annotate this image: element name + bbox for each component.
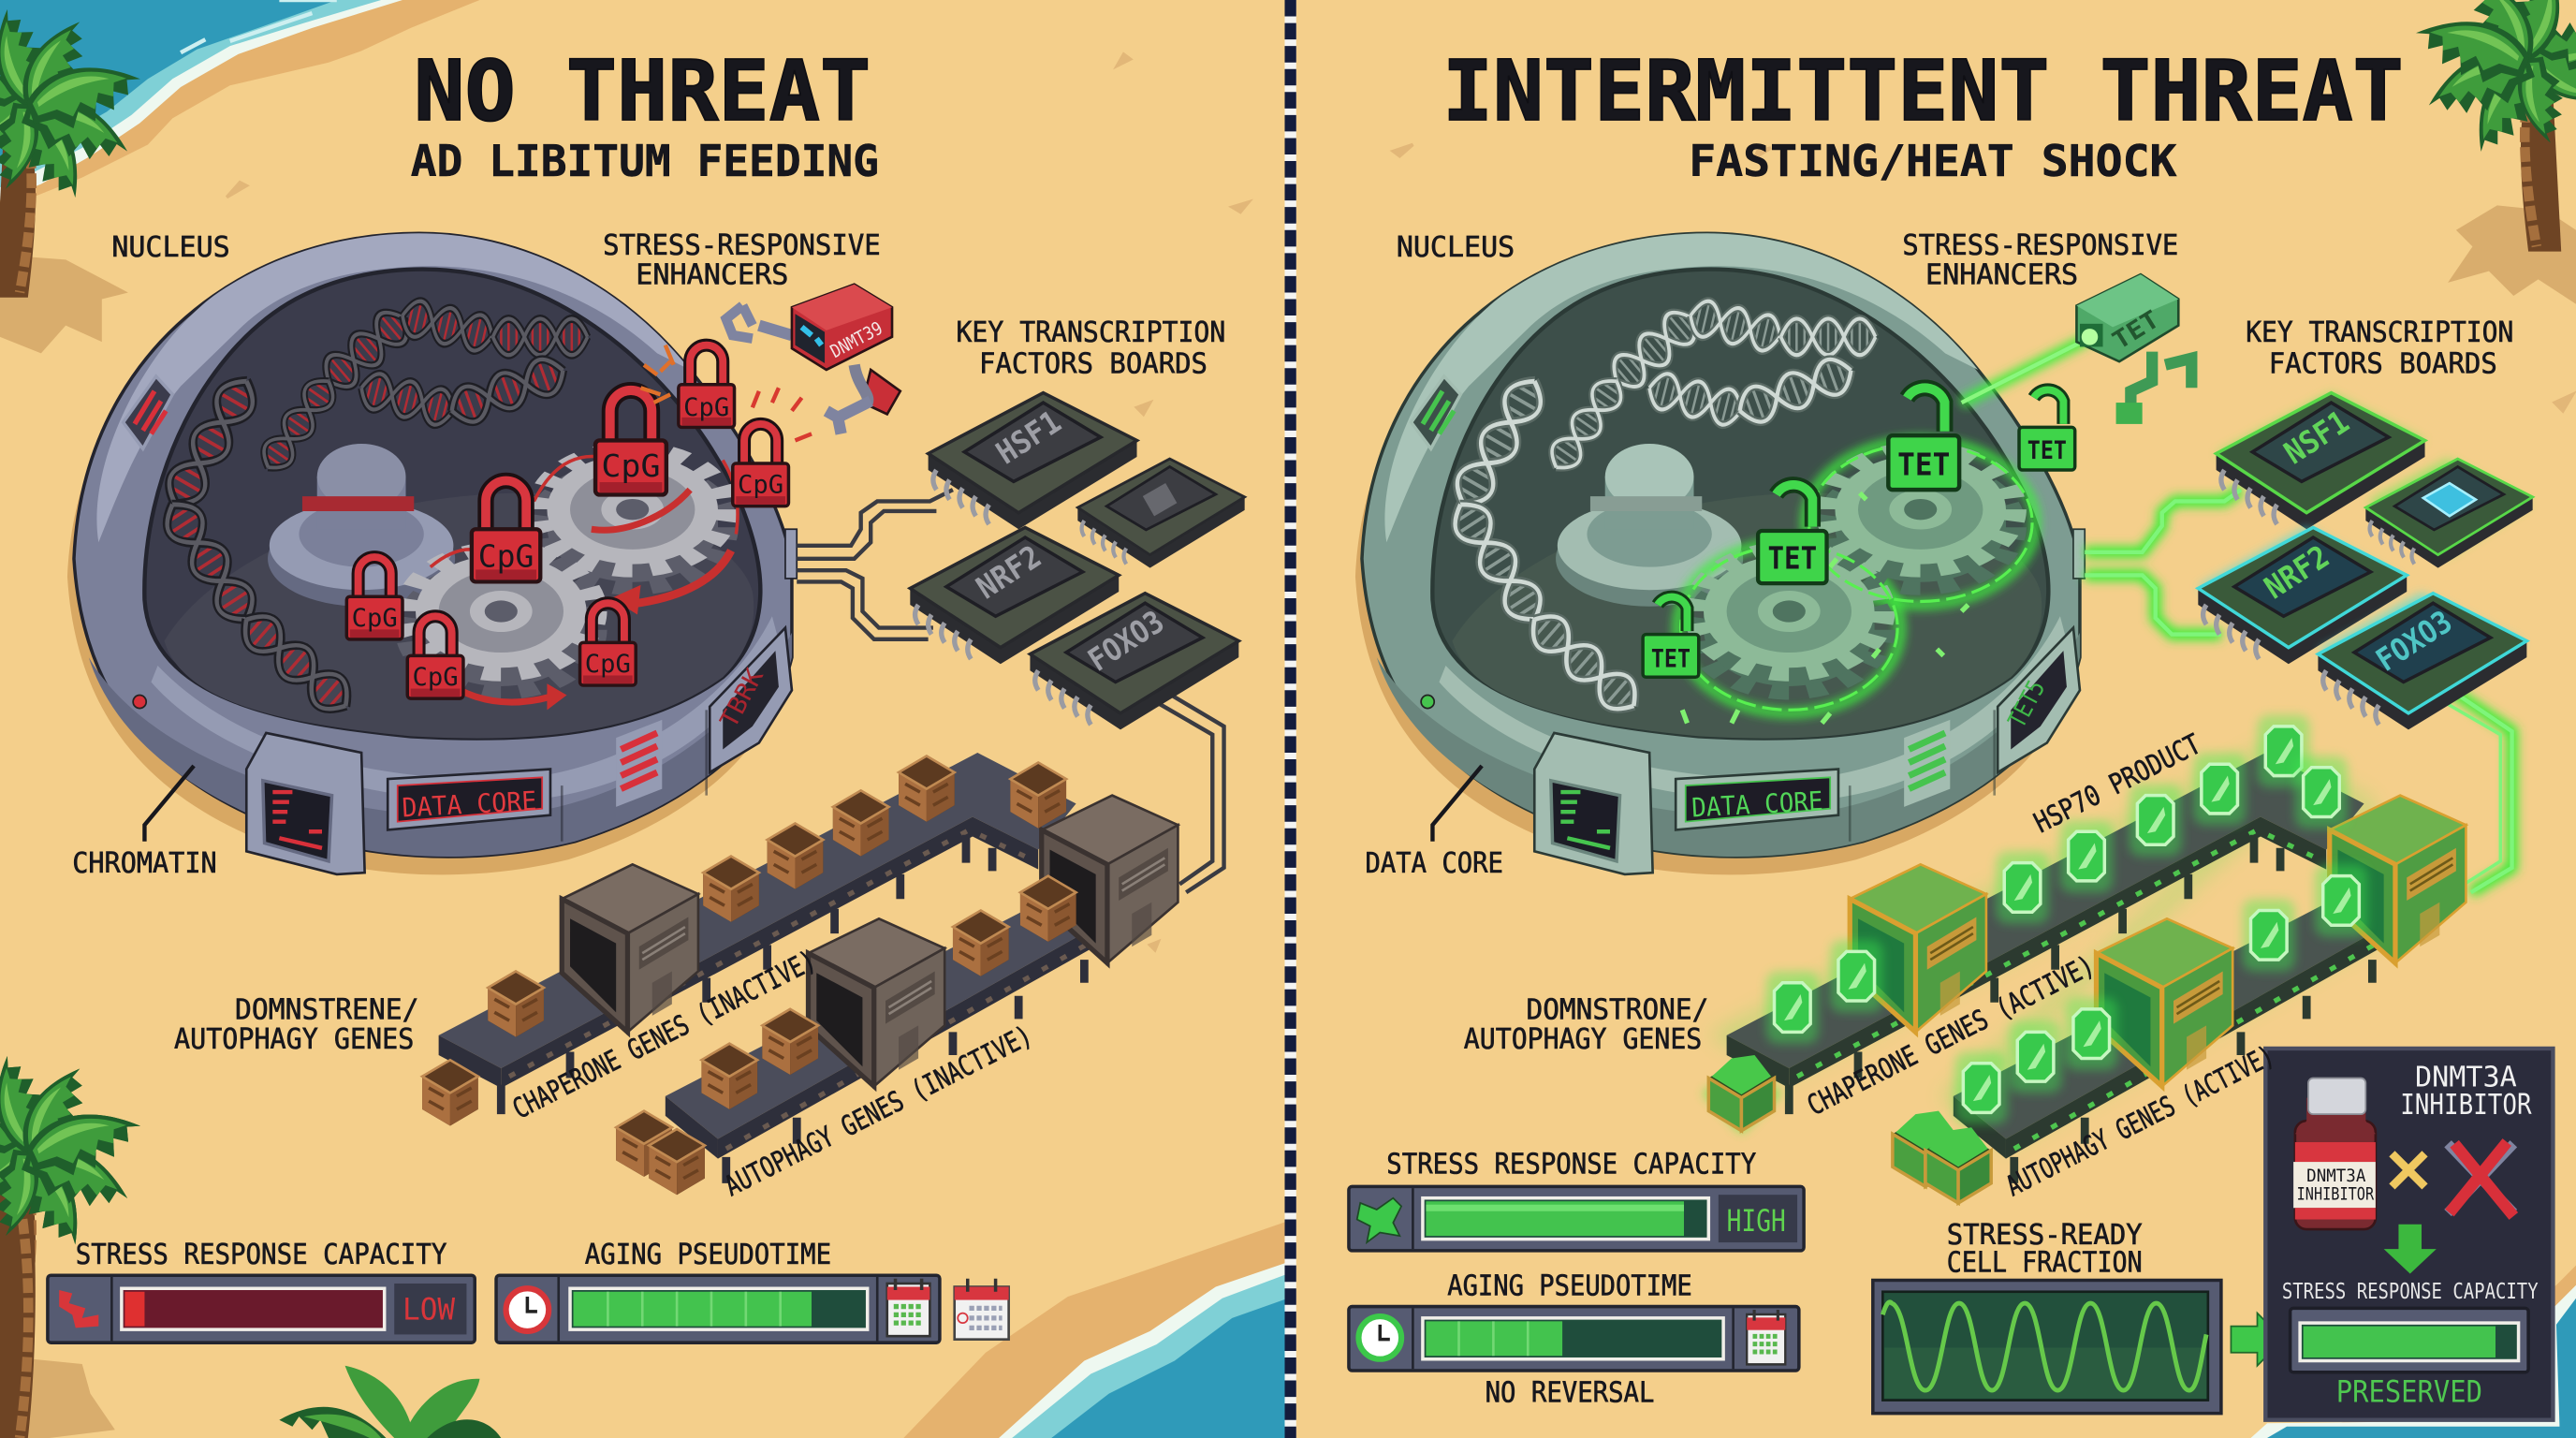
inhibitor heading: DNMT3A xyxy=(2415,1061,2517,1093)
label: stress response capacity: STRESS RESPONSE CAPACITY xyxy=(1386,1148,1756,1181)
subtitle: AD LIBITUM FEEDING xyxy=(411,136,879,186)
robot label: DNMT39 xyxy=(827,317,886,362)
cpg locks xyxy=(346,345,788,698)
lock: large cpg lower xyxy=(472,480,540,581)
label: hsp70 product: HSP70 PRODUCT xyxy=(2029,727,2206,840)
icon: yellow times xyxy=(2392,1153,2425,1186)
boards xyxy=(2198,393,2533,729)
label: stress-responsive enhancers: ENHANCERS xyxy=(636,259,788,292)
bar: preserved capacity xyxy=(2291,1308,2528,1372)
lock: cpg right xyxy=(733,424,788,506)
preserved label: PRESERVED xyxy=(2336,1375,2482,1409)
icon: inhibitor bottle xyxy=(2293,1078,2376,1229)
label: domnstrene autophagy genes: DOMNSTRENE/ xyxy=(235,993,419,1026)
icon: inhibitor bottle: INHIBITOR xyxy=(2297,1184,2375,1204)
data core sign: DATA CORE xyxy=(402,785,537,823)
panel: no threat xyxy=(48,43,1245,1343)
wires: nucleus to boards, glowing xyxy=(2085,490,2512,892)
board: nrf2: NRF2 xyxy=(970,538,1047,606)
label: stress-responsive enhancers xyxy=(1902,229,2178,292)
oscilloscope: stress-ready cell fraction xyxy=(1873,1280,2221,1414)
board: foxo3: FOXO3 xyxy=(1082,603,1170,679)
gears xyxy=(407,449,738,710)
label: autophagy genes inactive: AUTOPHAGY GENES (INACTIVE) xyxy=(720,1020,1037,1203)
data core label and leader: DATA CORE xyxy=(1365,847,1503,880)
label: transcription factor boards: KEY TRANSCRIPTION xyxy=(2246,316,2513,349)
label: transcription factor boards: FACTORS BOARDS xyxy=(979,347,1208,380)
lock: tet left: TET xyxy=(1651,646,1690,674)
lock: cpg bottom right xyxy=(580,603,636,685)
label: stress response capacity: STRESS RESPONSE CAPACITY xyxy=(76,1239,446,1271)
label: transcription factor boards xyxy=(2246,316,2513,380)
label: autophagy genes active: AUTOPHAGY GENES (ACTIVE) xyxy=(2001,1039,2279,1203)
machine: rear xyxy=(2330,796,2466,963)
label: stress-ready cell fraction xyxy=(1947,1219,2143,1280)
label: aging pseudotime: AGING PSEUDOTIME xyxy=(1447,1269,1692,1302)
bar: stress response low xyxy=(48,1275,475,1343)
board: nrf2 xyxy=(910,527,1119,664)
lock: tet right: TET xyxy=(2027,437,2067,465)
label: nucleus: NUCLEUS xyxy=(111,231,230,264)
board: foxo3 xyxy=(2318,594,2526,729)
crates xyxy=(422,756,1076,1195)
gears with glow xyxy=(1677,440,2036,723)
label: nucleus: NUCLEUS xyxy=(1397,231,1515,264)
divider xyxy=(1284,0,1296,1438)
label: domnstrene autophagy genes: AUTOPHAGY GENES xyxy=(174,1023,414,1056)
boards xyxy=(910,393,1245,729)
panel: no threat scenery xyxy=(0,0,1288,1438)
subtitle: FASTING/HEAT SHOCK xyxy=(1689,136,2177,186)
label: stress-responsive enhancers: ENHANCERS xyxy=(1925,259,2078,292)
lock: cpg left xyxy=(346,557,402,639)
machine: chaperone xyxy=(1850,864,1986,1032)
title: INTERMITTENT THREAT xyxy=(1442,43,2404,140)
label: stress-responsive enhancers xyxy=(603,229,881,292)
lock: cpg bottom: CpG xyxy=(413,664,459,692)
robot: dnmt3a xyxy=(726,285,900,433)
label: stress-responsive enhancers: STRESS-RESPONSIVE xyxy=(1902,229,2178,262)
arrow: to preserved capacity xyxy=(2231,1313,2284,1366)
chromatin label and leader: CHROMATIN xyxy=(72,847,217,880)
lock: tet large upper xyxy=(1888,388,1959,490)
board: nrf2: NRF2 xyxy=(2258,538,2335,606)
side panel text: TBRK xyxy=(715,665,769,733)
inhibitor heading xyxy=(2400,1061,2532,1122)
lock: large cpg: CpG xyxy=(601,448,661,484)
tet locks xyxy=(1643,388,2075,677)
chromatin dna strands xyxy=(157,298,588,720)
machine: chaperone xyxy=(562,864,698,1032)
conveyor lines active xyxy=(1727,753,2466,1183)
bar: aging pseudotime xyxy=(496,1275,940,1343)
label: domnstrone autophagy genes: AUTOPHAGY GENES xyxy=(1464,1023,1702,1056)
board label: nsf1: NSF1 xyxy=(2277,404,2355,471)
icon: crossed out wrench xyxy=(2448,1142,2513,1216)
lock: tet large lower: TET xyxy=(1767,539,1817,576)
label: transcription factor boards: FACTORS BOARDS xyxy=(2269,347,2497,380)
bar: stress response high xyxy=(1349,1186,1804,1251)
machine: autophagy xyxy=(809,918,944,1086)
title: NO THREAT xyxy=(414,43,871,140)
robot: tet with laser xyxy=(1962,274,2191,424)
panel: dnmt3a inhibitor xyxy=(2265,1049,2553,1420)
label: domnstrone autophagy genes xyxy=(1464,993,1708,1056)
side panel text: TET5 xyxy=(2003,676,2051,733)
lock: tet large lower xyxy=(1758,485,1827,583)
label: stress-ready cell fraction: CELL FRACTION xyxy=(1947,1247,2143,1280)
label: no reversal: NO REVERSAL xyxy=(1486,1376,1654,1409)
label: stress-responsive enhancers: STRESS-RESPONSIVE xyxy=(603,229,881,262)
lock: cpg left: CpG xyxy=(352,605,398,633)
lock: large cpg xyxy=(595,390,666,494)
lock: cpg top: CpG xyxy=(683,394,729,422)
lock: cpg bottom xyxy=(407,616,463,698)
lock: tet left xyxy=(1643,597,1699,677)
panel: intermittent threat scenery xyxy=(1393,0,2576,1438)
lock: cpg top xyxy=(679,345,735,427)
bar: aging pseudotime xyxy=(1349,1307,1799,1371)
data core sign: DATA CORE xyxy=(1690,785,1823,823)
sparks xyxy=(640,345,812,440)
robot label: TET xyxy=(2108,305,2164,356)
board: unlabeled xyxy=(1077,459,1245,568)
dna strands xyxy=(1445,298,1876,720)
nucleus dome xyxy=(67,233,797,874)
data core label and leader xyxy=(1365,766,1503,880)
bar: stress response high: HIGH xyxy=(1727,1205,1786,1239)
lock: large cpg lower: CpG xyxy=(478,538,534,575)
label: transcription factor boards: KEY TRANSCRIPTION xyxy=(956,316,1225,349)
board: nsf1 xyxy=(2217,393,2425,529)
icon: calendar xyxy=(955,1279,1009,1340)
inhibitor heading: INHIBITOR xyxy=(2400,1089,2532,1122)
board: blue core xyxy=(2365,459,2533,568)
bar: stress response low: LOW xyxy=(402,1294,456,1328)
conveyor lines xyxy=(422,753,1178,1195)
lock: tet right xyxy=(2019,389,2075,470)
green crates xyxy=(1702,1055,1991,1203)
label: transcription factor boards xyxy=(956,316,1225,380)
lock: cpg bottom right: CpG xyxy=(585,651,631,679)
label: domnstrone autophagy genes: DOMNSTRONE/ xyxy=(1526,993,1708,1026)
icon: inhibitor bottle: DNMT3A xyxy=(2306,1167,2365,1186)
board: hsf1: HSF1 xyxy=(989,404,1067,471)
board: hsf1 xyxy=(929,393,1137,529)
board: foxo3 xyxy=(1030,594,1238,729)
chromatin label and leader xyxy=(72,766,217,880)
machine: autophagy xyxy=(2097,918,2232,1086)
machine: rear xyxy=(1042,796,1178,963)
label: domnstrene autophagy genes xyxy=(174,993,419,1056)
label: stress-ready cell fraction: STRESS-READY xyxy=(1947,1219,2143,1252)
arrow: down xyxy=(2384,1225,2437,1273)
panel: intermittent threat xyxy=(1349,43,2553,1420)
label: chaperone genes active: CHAPERONE GENES (ACTIVE) xyxy=(1802,949,2100,1123)
label: chaperone genes inactive: CHAPERONE GENES (INACTIVE) xyxy=(507,945,821,1126)
wires: nucleus to boards xyxy=(797,490,1224,892)
label: aging pseudotime: AGING PSEUDOTIME xyxy=(585,1239,831,1271)
hsp70 products xyxy=(1766,715,2367,1124)
nucleus dome xyxy=(1355,233,2085,874)
lock: tet large upper: TET xyxy=(1897,446,1950,482)
lock: cpg right: CpG xyxy=(738,472,783,500)
board: nrf2 xyxy=(2198,527,2407,664)
board: foxo3: FOXO3 xyxy=(2370,603,2458,679)
